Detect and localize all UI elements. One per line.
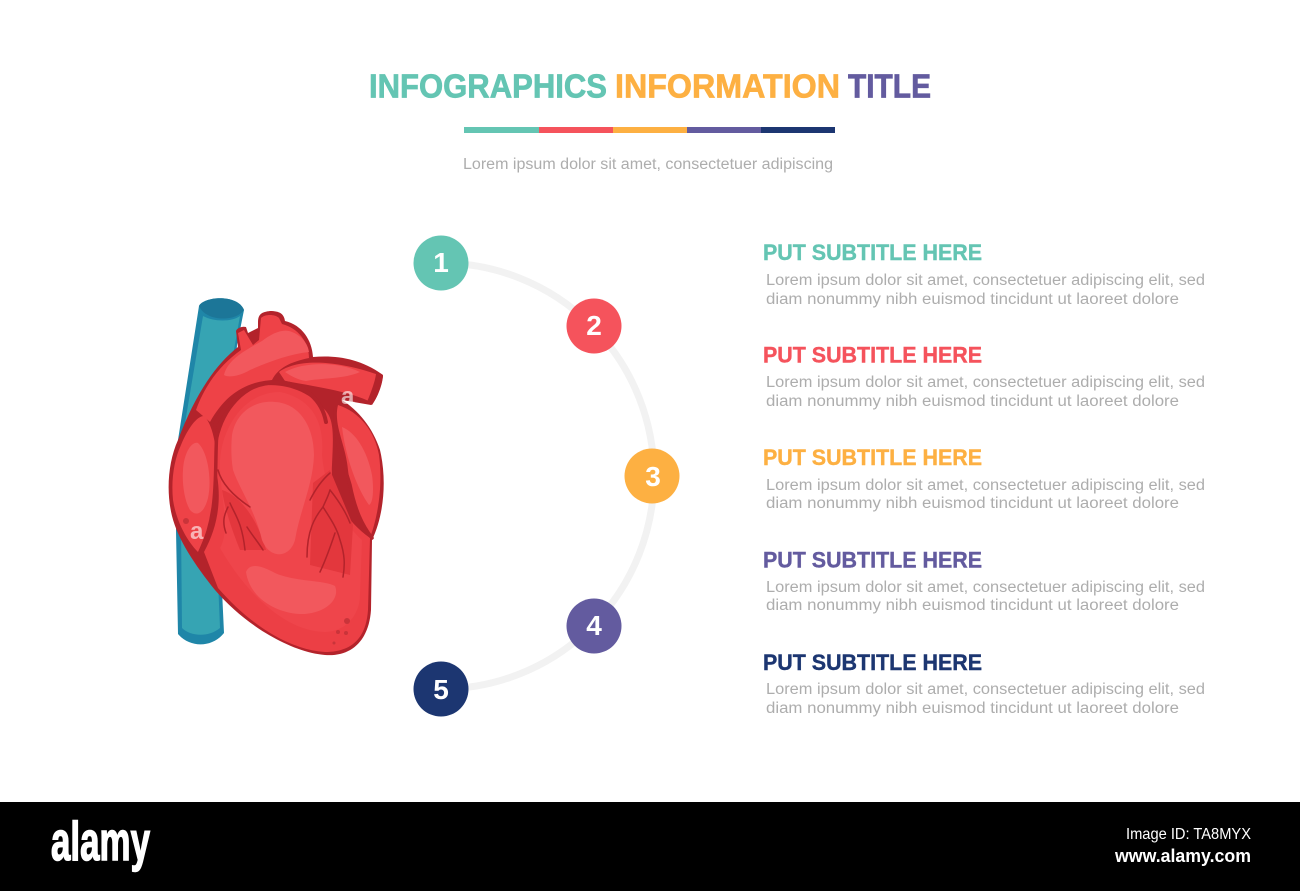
aorta arch	[279, 363, 379, 402]
step circle 1	[414, 236, 468, 290]
text block 1	[763, 240, 1205, 308]
text block 3	[763, 445, 1205, 512]
arc connector	[441, 263, 654, 689]
alamy logo: alamy	[51, 810, 150, 872]
text block 5	[763, 650, 1205, 717]
text block 5: diam nonummy nibh euismod tincidunt ut laoreet dolore	[766, 700, 1179, 717]
title	[369, 68, 931, 104]
watermark letters: a	[341, 383, 355, 410]
step circle 5: 5	[433, 674, 449, 705]
text block 5: Lorem ipsum dolor sit amet, consectetuer adipiscing elit, sed	[766, 681, 1205, 698]
website: www.alamy.com	[1114, 846, 1251, 866]
title: INFORMATION	[615, 68, 840, 104]
text block 2	[763, 342, 1205, 410]
step circle 4: 4	[586, 610, 602, 641]
chamber separators	[200, 382, 372, 553]
text block 5: PUT SUBTITLE HERE	[763, 650, 982, 675]
text block 2: PUT SUBTITLE HERE	[763, 342, 982, 368]
title: TITLE	[848, 68, 931, 104]
text block 1: diam nonummy nibh euismod tincidunt ut laoreet dolore	[766, 291, 1179, 308]
heart silhouette	[169, 311, 384, 655]
image id: Image ID: TA8MYX	[1126, 826, 1251, 843]
step circle 3: 3	[645, 461, 661, 492]
subtitle text: Lorem ipsum dolor sit amet, consectetuer adipiscing	[463, 156, 833, 173]
left lobe	[172, 416, 217, 552]
text block 3: Lorem ipsum dolor sit amet, consectetuer adipiscing elit, sed	[766, 477, 1205, 494]
text block 2: diam nonummy nibh euismod tincidunt ut laoreet dolore	[766, 393, 1179, 410]
text block 4	[763, 548, 1205, 614]
text block 3: PUT SUBTITLE HERE	[763, 445, 982, 470]
text block 4: PUT SUBTITLE HERE	[763, 548, 982, 572]
icon: anatomical heart	[169, 298, 384, 655]
text block 1: PUT SUBTITLE HERE	[763, 240, 982, 265]
text block 3: diam nonummy nibh euismod tincidunt ut laoreet dolore	[766, 495, 1179, 512]
text block 4: diam nonummy nibh euismod tincidunt ut laoreet dolore	[766, 597, 1179, 614]
text block 2: Lorem ipsum dolor sit amet, consectetuer adipiscing elit, sed	[766, 374, 1205, 391]
main ventricle	[204, 385, 370, 652]
watermark letters: a	[190, 518, 204, 545]
colored divider bar	[464, 127, 835, 133]
title: INFOGRAPHICS	[369, 68, 607, 104]
step circle 2: 2	[586, 310, 602, 341]
step circle 5	[414, 662, 468, 716]
vein	[176, 298, 244, 644]
footer bar	[0, 802, 1300, 891]
step circle 2	[566, 298, 622, 354]
upper chamber	[196, 315, 309, 422]
coronary vessels	[218, 470, 350, 577]
step circle 1: 1	[433, 247, 449, 278]
watermark letters	[190, 383, 355, 545]
step circle 4	[566, 598, 622, 654]
step circle 3	[624, 448, 680, 504]
text block 4: Lorem ipsum dolor sit amet, consectetuer adipiscing elit, sed	[766, 579, 1205, 596]
right lobe	[337, 405, 380, 535]
speckles	[183, 518, 350, 644]
text block 1: Lorem ipsum dolor sit amet, consectetuer adipiscing elit, sed	[766, 272, 1205, 289]
